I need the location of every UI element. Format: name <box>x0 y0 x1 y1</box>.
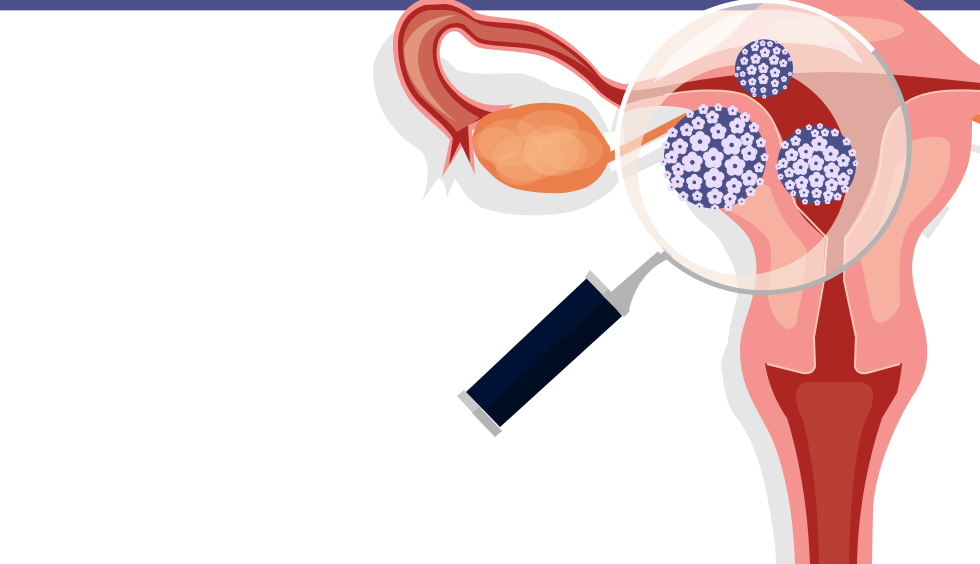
virus: right <box>777 126 856 204</box>
virus: large <box>663 107 766 209</box>
lens gloss crescent <box>618 1 910 293</box>
shadow: right side fragments <box>922 143 980 240</box>
uterus: pale cavity edging <box>665 90 980 373</box>
virus: top <box>735 39 793 97</box>
uterus: red cavity <box>610 72 980 564</box>
ligament: orange strips <box>606 113 980 159</box>
magnifier handle <box>457 247 673 437</box>
handle collar top <box>585 270 630 317</box>
lens highlight <box>653 9 863 83</box>
uterus: light muscle layers <box>713 16 950 329</box>
handle barrel <box>466 278 622 427</box>
handle collar bottom <box>457 390 502 437</box>
vagina inner wall <box>796 382 873 564</box>
fallopian tube <box>393 0 628 177</box>
shadow gap below ligament <box>609 126 695 168</box>
ovary <box>472 103 610 193</box>
top bar <box>0 0 980 11</box>
shadow: fallopian tube and ovary <box>373 30 695 215</box>
uterus body <box>625 0 980 564</box>
lens rim <box>617 1 909 293</box>
shadow: uterus <box>685 200 810 564</box>
handle neck <box>610 247 673 310</box>
